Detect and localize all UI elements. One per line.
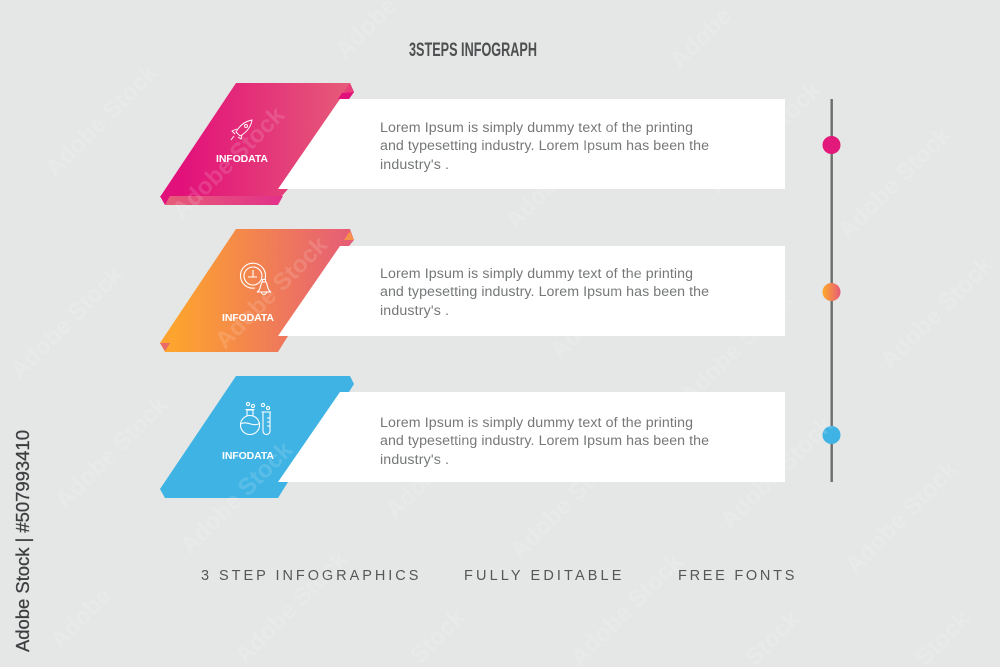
stock watermarks: Adobe Stock: [5, 261, 128, 384]
white text card: [278, 99, 785, 189]
body text: industry's .: [380, 452, 449, 468]
body text: industry's .: [380, 157, 449, 173]
footer captions: FREE FONTS: [678, 568, 797, 584]
stock watermarks: Adobe Stock: [500, 111, 623, 234]
stock watermarks: Adobe Stock: [40, 59, 163, 182]
stock watermarks: Adobe Stock: [175, 436, 298, 559]
stock watermarks: Adobe Stock: [715, 411, 838, 534]
stock watermarks: Adobe Stock: [210, 231, 333, 354]
white text card: [278, 246, 785, 336]
orange parallelogram: [160, 229, 354, 352]
blue parallelogram: [160, 376, 354, 498]
stock id: Adobe Stock | #507993410: [12, 430, 33, 652]
body text: Lorem Ipsum is simply dummy text of the printing: [380, 415, 693, 431]
panel: step 3: [160, 376, 785, 498]
marker: orange: [822, 283, 840, 301]
label: INFODATA: [222, 312, 274, 324]
body text: and typesetting industry. Lorem Ipsum has been the: [380, 433, 709, 449]
bottom fold: [165, 196, 283, 205]
stock watermarks: Adobe Stock: [167, 101, 290, 224]
stock watermarks: Adobe Stock: [505, 441, 628, 564]
body text: Lorem Ipsum is simply dummy text of the printing: [380, 266, 693, 282]
body text: Lorem Ipsum is simply dummy text of the printing: [380, 120, 693, 136]
body text: and typesetting industry. Lorem Ipsum has been the: [380, 138, 709, 154]
stock watermarks: Adobe Stock: [230, 546, 353, 667]
stock watermarks: Adobe Stock: [703, 76, 826, 199]
footer captions: [201, 568, 797, 584]
stock watermarks: Adobe Stock: [833, 121, 956, 244]
label: INFODATA: [222, 450, 274, 462]
stock watermarks: Adobe Stock: [840, 456, 963, 579]
title: 3STEPS INFOGRAPH: [409, 40, 537, 61]
white text card: [278, 392, 785, 482]
footer captions: FULLY EDITABLE: [464, 568, 624, 584]
stock watermarks: Adobe Stock: [380, 401, 503, 524]
timeline: [822, 99, 840, 482]
stock watermarks: Adobe Stock: [50, 391, 173, 514]
label: INFODATA: [216, 153, 268, 165]
icon: rocket: [231, 120, 252, 140]
stock watermarks: Adobe: [665, 2, 737, 74]
icon: clock and bell: [240, 263, 271, 294]
panel: step 2: [160, 229, 785, 352]
pink parallelogram: [160, 83, 354, 197]
icon: flask and test tube: [240, 402, 271, 434]
stock watermarks: Adobe Stock: [875, 251, 998, 374]
body text: industry's .: [380, 303, 449, 319]
bottom fold: [160, 343, 170, 351]
marker: blue: [822, 426, 840, 444]
marker: pink: [822, 136, 840, 154]
stock watermarks: Adobe Stock: [545, 241, 668, 364]
top fold: [344, 231, 354, 240]
footer captions: 3 STEP INFOGRAPHICS: [201, 568, 421, 584]
body text: and typesetting industry. Lorem Ipsum has been the: [380, 284, 709, 300]
panel: step 1: [160, 83, 785, 205]
top fold: [338, 92, 354, 99]
stock watermarks: Adobe: [45, 582, 117, 654]
stock watermarks: Adobe Stock: [675, 286, 798, 409]
